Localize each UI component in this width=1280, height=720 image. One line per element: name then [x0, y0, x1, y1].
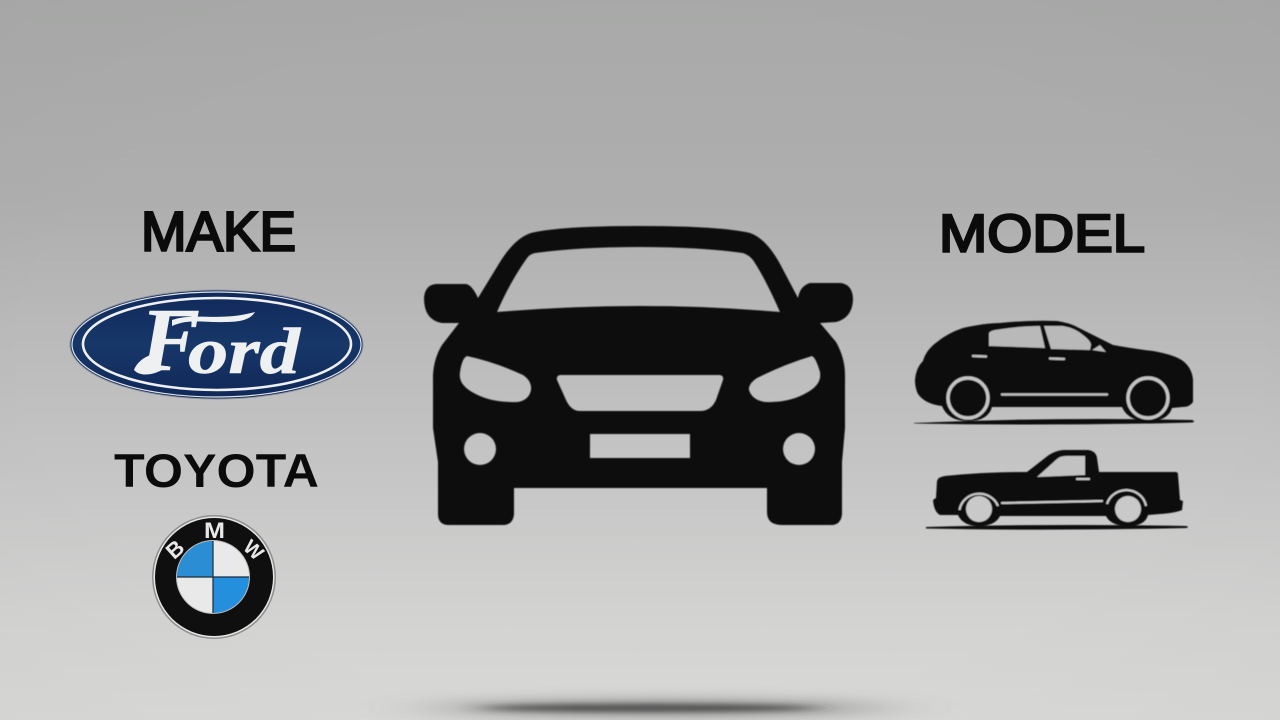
logo: BMW: M — [204, 518, 225, 543]
logo: BMW: W — [239, 536, 267, 565]
heading: make: MAKE — [141, 200, 296, 262]
logo: Ford — [70, 290, 363, 399]
brand name: Toyota: TOYOTA — [114, 444, 319, 497]
logo: BMW — [152, 515, 276, 639]
logo: Ford: ord — [188, 315, 301, 388]
logo: Ford: F — [139, 291, 200, 390]
heading: model: MODEL — [939, 204, 1145, 264]
icon: car front view — [424, 226, 853, 525]
logo: BMW: B — [161, 535, 189, 564]
icon: pickup truck side view — [926, 450, 1188, 530]
icon: hatchback side view — [914, 321, 1194, 425]
ground shadow — [430, 700, 890, 716]
